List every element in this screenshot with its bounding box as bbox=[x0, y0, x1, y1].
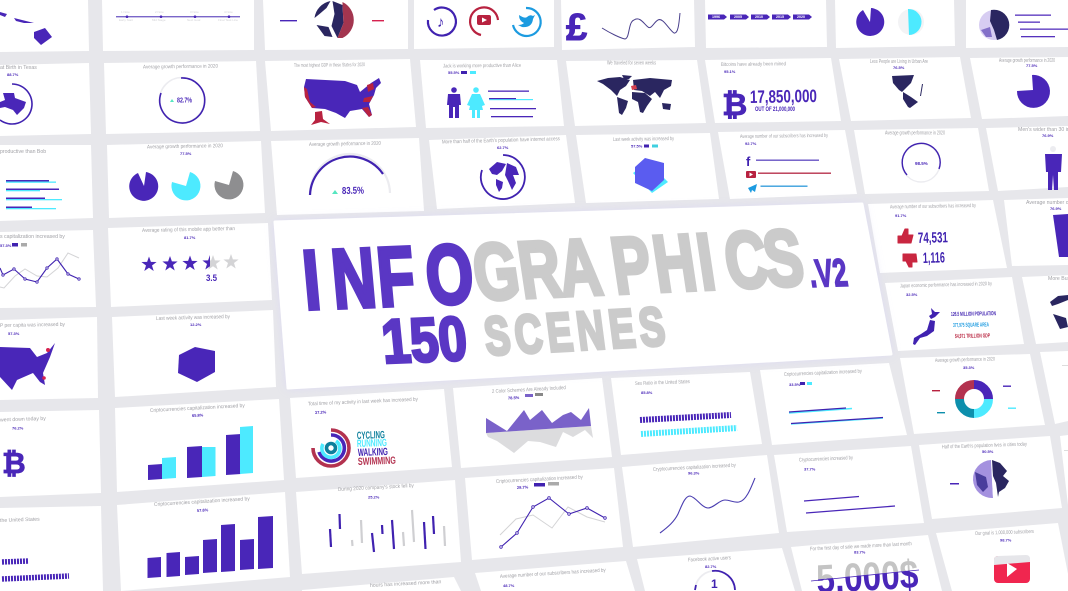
labels: CYCLING bbox=[357, 429, 385, 442]
stat: 88.7% bbox=[7, 72, 19, 77]
map: world bbox=[597, 75, 672, 115]
stat: 55.5% bbox=[448, 70, 460, 75]
title: For the first day of sale we made more than last month bbox=[810, 541, 912, 552]
panel: thumbs bbox=[868, 200, 1007, 273]
bars bbox=[488, 90, 536, 117]
bars bbox=[148, 426, 253, 480]
stat bbox=[332, 186, 364, 197]
stat: 83.7% bbox=[854, 550, 866, 554]
title: Criptocurrencies capitalization increased by bbox=[784, 369, 862, 378]
stat: 92.7% bbox=[745, 141, 757, 146]
arrow labels: 2020 bbox=[797, 15, 805, 19]
arrow labels: 2005 bbox=[734, 15, 742, 19]
panel: social bars bbox=[718, 130, 857, 199]
title: Cryptocurrencies capitalization increased by bbox=[653, 463, 736, 473]
icon: earth bbox=[314, 0, 354, 40]
panel: purple bar right bbox=[1004, 198, 1068, 266]
stat: 62.7% bbox=[497, 145, 509, 150]
number: 1,116 bbox=[923, 249, 945, 267]
labels: WALKING bbox=[358, 446, 388, 459]
panel: man and woman bbox=[420, 60, 564, 128]
fact: population: 126.5 MILLION POPULATION bbox=[951, 311, 996, 318]
panel: earth with bars bbox=[966, 0, 1068, 48]
title: Average rating of this mobile app better than bbox=[142, 226, 235, 234]
title: the United States bbox=[0, 517, 40, 524]
title: Average growth performance in 2020 bbox=[143, 64, 218, 70]
ring gauge bbox=[160, 78, 205, 123]
icon: thumb down bbox=[903, 254, 917, 267]
icon: half earth bbox=[973, 460, 1011, 498]
stat: 78.5% bbox=[508, 395, 520, 400]
pie: purple bbox=[129, 172, 158, 201]
map: USA bbox=[304, 78, 381, 125]
panel: donut bbox=[900, 354, 1045, 434]
title: Cryptocurrencies increased by bbox=[799, 455, 853, 463]
timeline line: 2 Note bbox=[155, 10, 164, 14]
icon: earth ring bbox=[481, 155, 525, 199]
icon: pound sign: £ bbox=[566, 7, 587, 49]
panel: currency down bbox=[0, 410, 101, 497]
stat: 48.7% bbox=[503, 583, 515, 588]
timeline line: Next Goal bbox=[187, 18, 201, 22]
people rows bbox=[640, 415, 737, 434]
panel: people row left bbox=[0, 506, 103, 591]
arrow labels bbox=[708, 14, 812, 20]
stat: 77.5% bbox=[1026, 63, 1038, 68]
labels: RUNNING bbox=[357, 437, 387, 450]
title: productive than Bob bbox=[0, 149, 46, 155]
bars bbox=[1015, 14, 1068, 37]
title: Average growth performance in 2020 bbox=[309, 141, 381, 148]
panel: youtube goal bbox=[936, 523, 1068, 591]
title: Our goal is 1,000,000 subscribers bbox=[975, 529, 1034, 537]
panel: main title card bbox=[275, 204, 891, 388]
panel: far right blank lower bbox=[1060, 435, 1068, 505]
line chart bbox=[602, 13, 680, 39]
heading: GRAPHICS: GRAPHICS bbox=[467, 212, 809, 317]
stat: 50.5% bbox=[982, 449, 994, 454]
stat: 12.2% bbox=[190, 322, 202, 327]
map: Americas bbox=[892, 75, 923, 108]
stat: 57.3% bbox=[0, 243, 12, 248]
panel: year arrows bbox=[705, 0, 827, 48]
timeline line bbox=[116, 10, 240, 22]
panel: timeline bbox=[102, 0, 254, 51]
panel: US per capita bbox=[0, 317, 98, 400]
panel: two line chart bbox=[465, 468, 623, 560]
rating value: 3.5 bbox=[206, 273, 217, 283]
title: During 2020 company's stock fell by bbox=[338, 483, 414, 493]
panel: activity rings bbox=[290, 389, 452, 478]
stat: 95.1% bbox=[724, 69, 736, 74]
fact: area: 377,975 SQUARE AREA bbox=[953, 322, 989, 329]
panel: star rating bbox=[108, 223, 272, 307]
icon: half earth bbox=[979, 10, 1009, 40]
title: 2 Color Schemes Are Already Included bbox=[492, 385, 566, 395]
icon: earth bbox=[1050, 295, 1068, 329]
heading: V2: .V2 bbox=[806, 252, 851, 296]
pie: gray bbox=[214, 171, 243, 199]
ring bbox=[695, 571, 735, 590]
title: We traveled for seven weeks bbox=[607, 60, 656, 66]
panel: half earth bbox=[919, 436, 1062, 519]
stat: 76.9% bbox=[1042, 133, 1054, 138]
donut chart bbox=[960, 384, 988, 414]
title: Bitcoins have already been mined bbox=[721, 61, 786, 68]
panel: pound wave chart bbox=[561, 0, 695, 50]
title: went down today by bbox=[0, 416, 46, 423]
note bbox=[1064, 450, 1068, 451]
title: Half of the Earth's population lives in cities today bbox=[942, 442, 1027, 450]
timeline line: 3 Note bbox=[190, 10, 199, 14]
stat: 98.5% bbox=[915, 161, 928, 166]
rings chart bbox=[313, 430, 349, 466]
labels bbox=[357, 429, 396, 468]
pie bbox=[1017, 75, 1050, 108]
panel: crypto increased bbox=[774, 446, 924, 532]
panel: Bob bars bbox=[0, 145, 93, 221]
panel: bitcoin total bbox=[705, 58, 841, 123]
timeline line: Final Task Line bbox=[218, 18, 238, 22]
stat: 76.5% bbox=[893, 65, 905, 70]
gauge bbox=[310, 154, 390, 195]
stat: 81.7% bbox=[184, 235, 196, 240]
panel: Japan bbox=[885, 277, 1024, 351]
stat: 57.5% bbox=[631, 144, 643, 148]
panel: earth ring bbox=[429, 135, 575, 209]
facebook row: f bbox=[746, 154, 751, 169]
purple line bbox=[0, 258, 80, 283]
panel: urban globe bbox=[839, 57, 971, 121]
purple area bbox=[486, 408, 591, 433]
bars bbox=[148, 516, 273, 578]
title: Sex Ratio in the United States bbox=[635, 379, 690, 387]
title: Criptocurrencies capitalization increased by bbox=[150, 403, 245, 414]
panel: area chart bbox=[453, 378, 612, 468]
title: at Birth in Texas bbox=[0, 65, 37, 71]
icon: bitcoin: ₿ bbox=[722, 87, 747, 123]
title: More than half of the Earth's population have internet access bbox=[442, 136, 560, 145]
panel: radar bbox=[576, 133, 719, 203]
panel: man right bbox=[986, 126, 1068, 191]
heading: 150: 150 bbox=[379, 305, 470, 377]
stat: 37.7% bbox=[804, 466, 816, 472]
title: Average number of our subscribers has increased by bbox=[500, 568, 606, 580]
stat: 82.7% bbox=[177, 98, 193, 104]
heading: INFO: INFO bbox=[299, 227, 477, 328]
stat bbox=[789, 382, 812, 387]
icon: YouTube ring bbox=[470, 7, 498, 35]
title: Criptocurrencies capitalization increased by bbox=[154, 496, 250, 508]
telegram row bbox=[748, 184, 808, 193]
title: Criptocurrencies capitalization increased by bbox=[496, 474, 583, 485]
map: Japan bbox=[913, 308, 940, 345]
stat: 37.2% bbox=[315, 409, 327, 415]
title: Average number of our subscribers has increased by bbox=[890, 203, 976, 210]
title: Japan economic performance has increased in 2020 by bbox=[900, 281, 992, 289]
icon: man bbox=[1045, 146, 1062, 190]
panel: world map bbox=[566, 60, 706, 126]
stars bbox=[141, 254, 239, 271]
title: Average number of our subscribers has increased by bbox=[740, 133, 828, 140]
panel: subscribers bottom bbox=[475, 561, 635, 591]
ring bbox=[902, 143, 940, 182]
panel: three pies bbox=[107, 141, 265, 218]
bars bbox=[789, 408, 883, 424]
stat: 57.6% bbox=[197, 507, 209, 513]
stat: 96.3% bbox=[688, 470, 700, 476]
title: Facebook active users bbox=[688, 555, 731, 563]
stat bbox=[448, 70, 476, 75]
number: 74,531 bbox=[918, 229, 948, 247]
panel: Hawaii map bbox=[0, 0, 89, 52]
panel: facebook ring bbox=[637, 548, 795, 591]
fact: gdp: $4,971 TRILLION GDP bbox=[955, 333, 990, 340]
stat: 82.7% bbox=[705, 564, 717, 569]
panel: social rings bbox=[414, 0, 554, 49]
caption: OUT OF 21,000,000 bbox=[755, 106, 795, 113]
panel: two bars bbox=[760, 363, 907, 445]
panel: ring 98.5 bbox=[854, 128, 989, 194]
timeline line: 4 Note bbox=[224, 10, 233, 14]
pie: cyan bbox=[898, 9, 924, 35]
stat: 33.5% bbox=[789, 382, 801, 387]
stat bbox=[631, 144, 658, 148]
title: Average growth performance in 2020 bbox=[935, 356, 995, 364]
stat bbox=[508, 393, 543, 400]
glow behind center panel bbox=[275, 204, 891, 388]
icon: woman bbox=[467, 87, 485, 118]
panel: far right blank bbox=[1040, 351, 1068, 424]
gray line bbox=[500, 507, 605, 535]
stat: 85.8% bbox=[641, 390, 653, 395]
arrow labels: 2010 bbox=[755, 15, 763, 19]
timeline line: Early Start bbox=[119, 18, 133, 22]
people rows bbox=[2, 561, 69, 579]
stat: 98.7% bbox=[1000, 538, 1012, 542]
stat: 57.3% bbox=[8, 331, 20, 336]
title: The most highest GDP in these States for 2020 bbox=[294, 62, 365, 69]
title: Last week activity was increased by bbox=[156, 314, 230, 322]
title: Average growth performance in 2020 bbox=[885, 130, 945, 136]
arrow labels: 2015 bbox=[776, 15, 784, 19]
panel: half gauge bbox=[271, 138, 424, 215]
panel: stock chart bbox=[296, 480, 461, 574]
stat: 32.5% bbox=[906, 292, 918, 297]
panel: US GDP map bbox=[265, 59, 416, 131]
title: Less People are Living in Urban Are bbox=[870, 59, 928, 65]
label bbox=[950, 483, 959, 484]
icon: Texas ring bbox=[0, 84, 32, 124]
number: 17,850,000 bbox=[750, 86, 817, 107]
map: USA bbox=[0, 343, 55, 390]
panel: 5000 sale bbox=[791, 535, 942, 591]
panel: bar chart bbox=[117, 492, 290, 591]
stat bbox=[170, 98, 193, 104]
panel: globe far right bbox=[1022, 275, 1068, 344]
panel: line chart left bbox=[0, 230, 96, 308]
stat: 76.9% bbox=[1050, 206, 1062, 211]
arrow labels: 1996 bbox=[712, 15, 720, 19]
title: Average growth performance in 2020 bbox=[147, 143, 223, 150]
icon: man bbox=[447, 87, 461, 118]
timeline line: Mid Stage bbox=[152, 18, 166, 22]
icon: TikTok ring: ♪ bbox=[437, 14, 444, 31]
stat: 76.2% bbox=[12, 426, 24, 430]
stat bbox=[517, 482, 559, 490]
panel: curve chart bbox=[622, 455, 779, 547]
radar chart bbox=[633, 158, 668, 193]
title: Total time of my activity in last week has increased by bbox=[308, 397, 418, 407]
heading: SCENES: SCENES bbox=[481, 296, 673, 367]
bars bbox=[6, 180, 62, 209]
panel: bottom hours bbox=[302, 577, 461, 591]
panel: Texas bbox=[0, 63, 91, 136]
icon: currency: ₿ bbox=[2, 446, 26, 480]
map: Hawaii islands bbox=[0, 12, 52, 45]
gray line bbox=[0, 253, 79, 288]
icon: Twitter ring bbox=[513, 8, 541, 36]
youtube row bbox=[746, 171, 831, 178]
stat: 65.8% bbox=[192, 412, 204, 418]
panel: ring 82.7 bbox=[104, 61, 260, 134]
title: P per capita was increased by bbox=[0, 322, 65, 329]
stat: 91.7% bbox=[895, 213, 907, 218]
title: Last week activity was increased by bbox=[613, 136, 674, 143]
gray area bbox=[486, 426, 593, 453]
legend bbox=[932, 386, 1016, 413]
bar bbox=[1053, 214, 1068, 257]
digit: 1 bbox=[711, 577, 718, 591]
panel: hexagon bbox=[112, 310, 276, 397]
labels: SWIMMING bbox=[358, 455, 396, 468]
stat: 83.5% bbox=[342, 186, 364, 197]
icon: youtube bbox=[994, 555, 1030, 583]
title: Jack is working more productive than Alice bbox=[443, 63, 521, 69]
panel: pie right bbox=[970, 57, 1068, 119]
divider line bbox=[811, 570, 919, 581]
stat: 77.5% bbox=[180, 151, 192, 156]
radar bbox=[178, 347, 215, 382]
pie: cyan bbox=[171, 172, 200, 200]
labels bbox=[280, 20, 384, 21]
bars bbox=[804, 496, 895, 513]
stat: 25.2% bbox=[368, 494, 380, 500]
icon: thumb up bbox=[898, 229, 913, 243]
panel: sex ratio bbox=[611, 372, 762, 455]
curve bbox=[660, 478, 755, 533]
stat: 35.3% bbox=[963, 365, 975, 370]
purple line bbox=[500, 497, 606, 548]
title: hours has increased more than bbox=[370, 579, 442, 589]
timeline line: 1 Note bbox=[121, 10, 130, 14]
pie: purple bbox=[856, 8, 884, 36]
title: s capitalization increased by bbox=[0, 234, 65, 240]
panel: earth comparison bbox=[263, 0, 408, 50]
panel: two pies bbox=[835, 0, 955, 48]
candlesticks bbox=[330, 510, 445, 552]
panel: paired bars bbox=[115, 399, 284, 492]
label bbox=[1062, 365, 1068, 366]
stat: 28.7% bbox=[517, 484, 529, 490]
